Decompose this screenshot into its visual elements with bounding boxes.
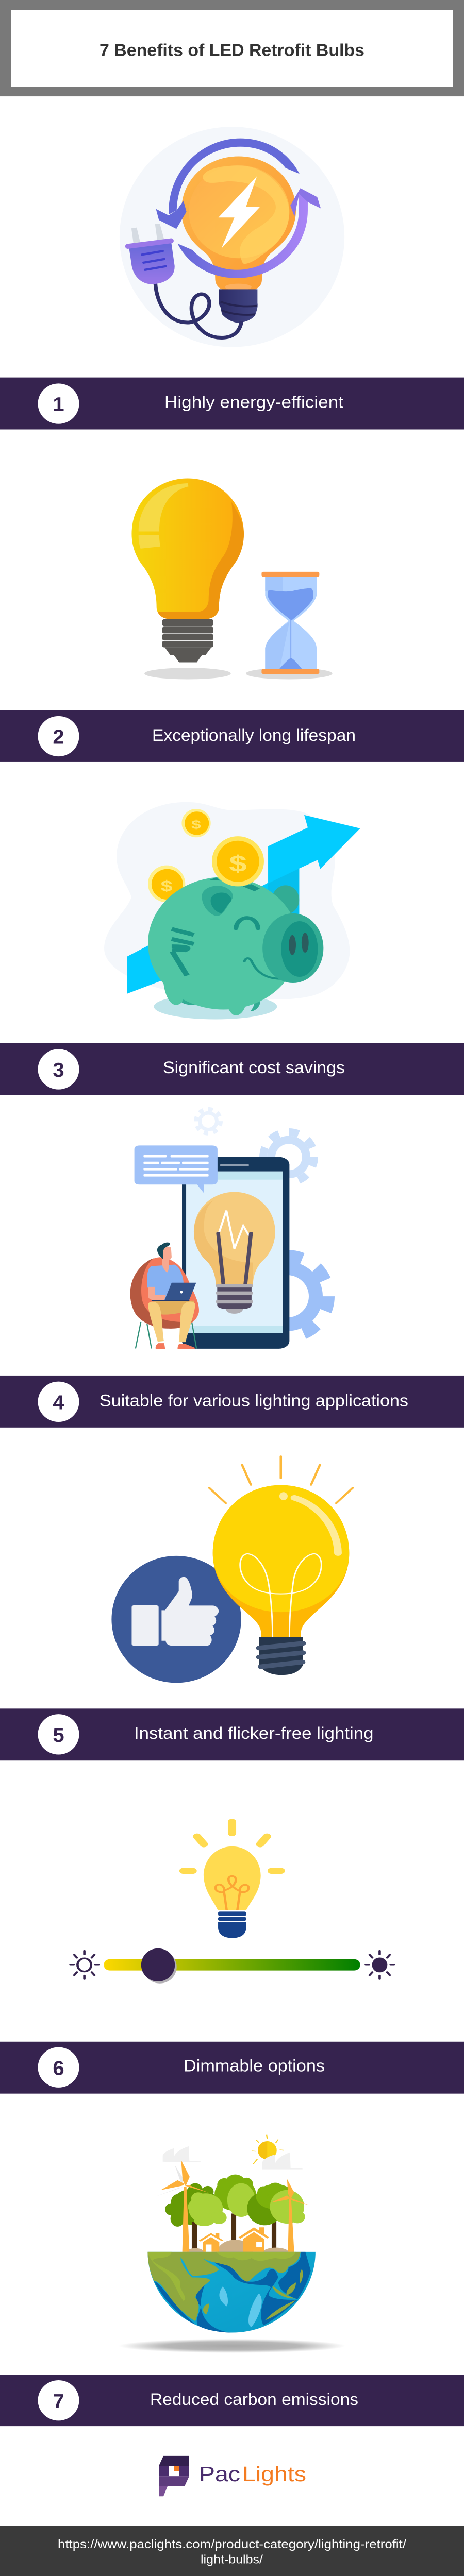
icon: thumbs up badge [111, 1556, 241, 1683]
icon: bright sun [366, 1951, 394, 1979]
icon: pig smile [244, 958, 279, 979]
arrow: upper cycle arrow [156, 139, 300, 229]
icon: pig body [148, 877, 299, 1015]
bar 2 [0, 710, 464, 762]
icon: right wind turbine [271, 2179, 309, 2252]
icon: pig far ear [272, 885, 299, 914]
bar 7: Reduced carbon emissions [150, 2389, 358, 2409]
icon: person on chair [130, 1243, 199, 1349]
icon: ground shadow [119, 2339, 345, 2353]
icon: bulb on phone [194, 1192, 275, 1314]
icon: logo mark [159, 2456, 189, 2496]
icon: medium gear [263, 1132, 314, 1182]
logo: PacLights: Lights [242, 2462, 306, 2486]
bar 1 [0, 378, 464, 429]
icon: big coin [212, 836, 264, 886]
icon: clouds [163, 2146, 201, 2162]
footer with URL: https://www.paclights.com/product-category/lighting-retrofit/ [58, 2537, 406, 2551]
icon: bulb [204, 1846, 261, 1938]
background circle [120, 127, 344, 347]
icon: cloud over sun [262, 2153, 303, 2170]
icon: slider thumb [141, 1948, 177, 1984]
bar 3: 3 [53, 1059, 64, 1081]
background blob [104, 802, 350, 999]
bar 6: Dimmable options [184, 2056, 325, 2075]
icon: yellow bulb [131, 478, 244, 662]
bar 5: 5 [53, 1724, 64, 1747]
bar 3: Significant cost savings [163, 1058, 345, 1077]
icon: small gear [196, 1109, 221, 1133]
icon: turbine shadow [156, 2165, 184, 2196]
bar 4 [0, 1376, 464, 1428]
illustration: lighting applications gears [196, 1109, 328, 1337]
icon: big coin: $ [229, 851, 247, 876]
icon: hills [187, 2240, 288, 2264]
title banner [0, 0, 464, 96]
icon: dark left tree [165, 2183, 221, 2249]
icon: hourglass [261, 572, 319, 674]
illustration: long lifespan bulb and hourglass [131, 478, 333, 679]
icon: top coin [181, 809, 211, 837]
illustration: instant lighting [111, 1456, 353, 1683]
icon: sun [252, 2135, 284, 2164]
bar 7 [0, 2375, 464, 2426]
icon: right tree [247, 2183, 305, 2248]
chart: brightness slider track [104, 1959, 360, 1971]
bar 6 [0, 2042, 464, 2094]
icon: big bulb [213, 1485, 349, 1675]
illustration: phone, bulb and person [130, 1145, 289, 1349]
icon: rupee symbol [172, 929, 194, 976]
icon: phone [182, 1157, 289, 1349]
arrow: lower cycle arrow [177, 188, 321, 278]
bar 1: Highly energy-efficient [164, 393, 343, 411]
icon: left coin: $ [161, 877, 173, 894]
bar 5: Instant and flicker-free lighting [134, 1723, 374, 1742]
logo wordmark: Pac [199, 2462, 240, 2486]
icon: cord [155, 284, 241, 337]
icon: plug [128, 224, 175, 284]
icon: pig eye [236, 918, 258, 928]
illustration: cost savings piggy bank [104, 802, 360, 1019]
icon: dim sun [71, 1951, 98, 1979]
bar 2: 2 [53, 726, 64, 749]
bar 5 [0, 1708, 464, 1760]
icon: pig near ear [202, 886, 233, 916]
icon: large gear [246, 1256, 328, 1337]
shadows [144, 668, 333, 679]
illustration: energy-efficient bulb with plug [120, 127, 344, 347]
icon: light rays [209, 1456, 353, 1503]
footer with URL [0, 2526, 464, 2576]
icon: left coin [148, 866, 185, 902]
bar 6: 6 [53, 2057, 64, 2079]
icon: left wind turbine [161, 2160, 209, 2252]
title: 7 Benefits of LED Retrofit Bulbs [100, 41, 364, 60]
floor shadow [154, 994, 277, 1019]
bar 4: Suitable for various lighting applications [100, 1391, 408, 1410]
icon: middle tree [214, 2175, 256, 2241]
arrow: rising blue arrow [127, 815, 360, 994]
bar 4: 4 [53, 1392, 64, 1414]
icon: glowing bulb [181, 157, 296, 323]
logo: PacLights [159, 2456, 306, 2496]
callout: speech bubble [135, 1145, 218, 1194]
icon: top coin: $ [191, 818, 201, 832]
icon: rays [184, 1822, 281, 1871]
illustration: dimmable slider [71, 1822, 394, 1984]
illustration: reduced carbon emissions earth [147, 2135, 316, 2333]
bar 7: 7 [53, 2390, 64, 2413]
bar 3 [0, 1043, 464, 1095]
icon: light left tree [188, 2192, 227, 2226]
icon: houses [199, 2227, 269, 2252]
bar 1: 1 [53, 394, 64, 416]
footer with URL: light-bulbs/ [201, 2553, 263, 2566]
icon: pig snout [262, 913, 323, 983]
bar 2: Exceptionally long lifespan [152, 725, 356, 744]
icon: half globe [147, 2252, 316, 2333]
